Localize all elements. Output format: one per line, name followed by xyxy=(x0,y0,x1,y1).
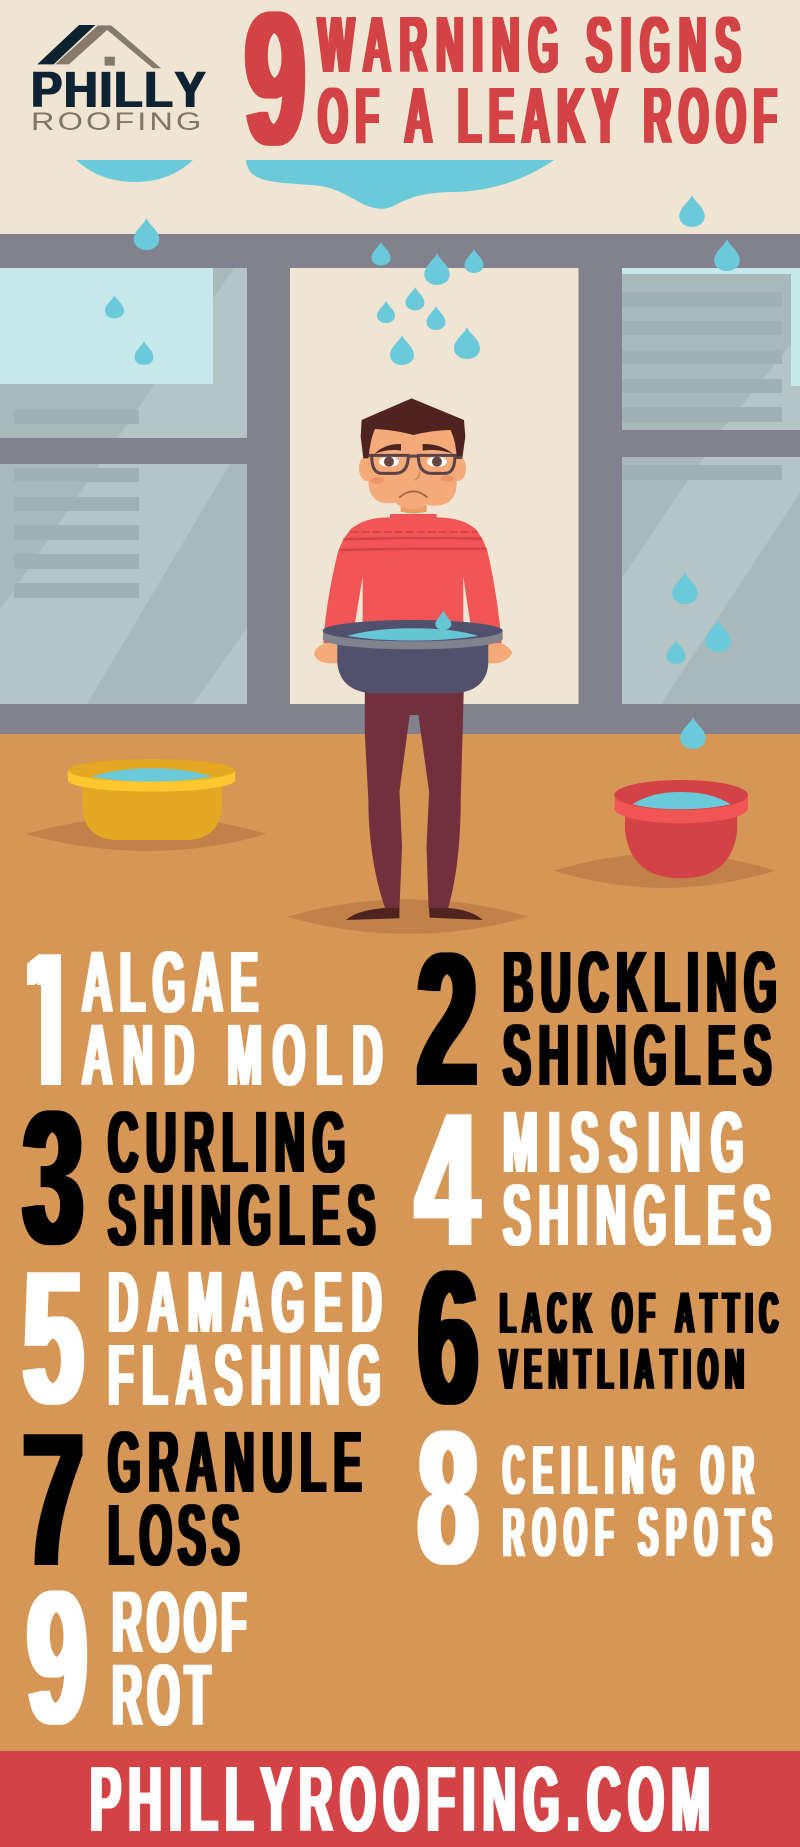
sign 3: curling shingles xyxy=(23,1071,375,1284)
floor xyxy=(0,734,800,1751)
neck xyxy=(401,505,427,513)
water drops xyxy=(105,195,740,749)
number 2: 2 xyxy=(417,913,477,1126)
logo: Philly Roofing xyxy=(31,25,206,136)
glasses xyxy=(369,455,462,473)
icon: roof xyxy=(37,25,161,68)
sign 1 text xyxy=(82,934,382,1104)
sign 7 text: GRANULE xyxy=(108,1414,361,1511)
window: right pane xyxy=(621,268,800,704)
eyes xyxy=(379,456,399,467)
sign 9: roof rot xyxy=(27,1551,246,1764)
pot body xyxy=(337,643,488,693)
sign 6: lack of attic ventilation xyxy=(418,1231,778,1444)
cheeks xyxy=(371,477,384,484)
number 7: 7 xyxy=(23,1393,83,1606)
number 1: 1 xyxy=(6,914,91,1126)
sign 4 text: MISSING xyxy=(503,1094,743,1191)
sweater xyxy=(323,514,502,643)
sign 6 text: VENTLIATION xyxy=(500,1337,744,1402)
pot rim xyxy=(323,629,503,649)
sign 4 text: SHINGLES xyxy=(503,1167,771,1264)
man shadow and legs xyxy=(287,690,529,934)
title lines xyxy=(318,1,777,161)
yellow bucket xyxy=(26,759,266,851)
sign 3 text: SHINGLES xyxy=(108,1167,375,1264)
sign 5 text: FLASHING xyxy=(108,1327,381,1424)
shoes xyxy=(346,908,399,920)
sign 3 text: CURLING xyxy=(108,1094,345,1191)
sign 8: ceiling or roof spots xyxy=(418,1391,772,1604)
sign 4: missing shingles xyxy=(416,1074,771,1286)
hair xyxy=(361,398,465,458)
red bucket xyxy=(554,780,776,888)
number 4: 4 xyxy=(416,1074,478,1286)
sign 4 text xyxy=(503,1094,771,1264)
eyebrows xyxy=(374,444,401,454)
sign 2 text: SHINGLES xyxy=(503,1007,771,1104)
ceiling water: left puddle xyxy=(76,160,193,182)
nose xyxy=(413,468,420,481)
sign 5: damaged flashing xyxy=(23,1231,382,1444)
title xyxy=(245,0,777,185)
sign 7: granule loss xyxy=(23,1393,361,1606)
sign 7 text: LOSS xyxy=(108,1487,240,1584)
logo wordmark: ROOFING: ROOFING xyxy=(31,108,201,136)
pot water xyxy=(347,628,478,641)
number 8: 8 xyxy=(418,1391,478,1604)
sweater stripes xyxy=(339,532,487,550)
sign 9 text: ROT xyxy=(112,1647,210,1744)
sign 6 text xyxy=(500,1281,778,1402)
sign 9 text xyxy=(112,1574,246,1744)
logo wordmark: PHILLY: PHILLY xyxy=(31,62,206,118)
sign 7 text xyxy=(108,1414,361,1584)
sign 9 text: ROOF xyxy=(112,1574,246,1671)
number 9: 9 xyxy=(27,1551,87,1764)
sign 5 text xyxy=(108,1254,382,1424)
falling drop in pot xyxy=(435,611,451,630)
ceiling water: large leak xyxy=(246,160,554,209)
sign 1 text: AND MOLD xyxy=(82,1007,382,1104)
trousers xyxy=(365,690,464,908)
sign 2 text: BUCKLING xyxy=(503,934,777,1031)
footer band xyxy=(0,1751,800,1847)
number 3: 3 xyxy=(23,1071,83,1284)
sign 8 text: CEILING OR xyxy=(503,1431,754,1510)
sign 3 text xyxy=(108,1094,375,1264)
sign 1: algae and mold xyxy=(27,951,383,1086)
sign 2 text xyxy=(503,934,777,1104)
man: upper body xyxy=(314,398,512,693)
sign 8 text: ROOF SPOTS xyxy=(503,1493,772,1572)
title lines: WARNING SIGNS xyxy=(318,1,741,90)
sign 6 text: LACK OF ATTIC xyxy=(500,1281,778,1346)
sign 1 text: ALGAE xyxy=(82,934,258,1031)
face xyxy=(368,429,457,509)
number 5: 5 xyxy=(23,1231,83,1444)
sign 5 text: DAMAGED xyxy=(108,1254,382,1351)
hands xyxy=(314,643,338,664)
number 6: 6 xyxy=(418,1231,478,1444)
ears xyxy=(359,456,374,481)
mouth xyxy=(399,491,428,498)
title lines: OF A LEAKY ROOF xyxy=(318,72,777,161)
sign 2: buckling shingles xyxy=(417,913,777,1126)
window: left pane xyxy=(0,268,247,704)
sign 8 text xyxy=(503,1431,772,1572)
window frame xyxy=(0,234,800,734)
